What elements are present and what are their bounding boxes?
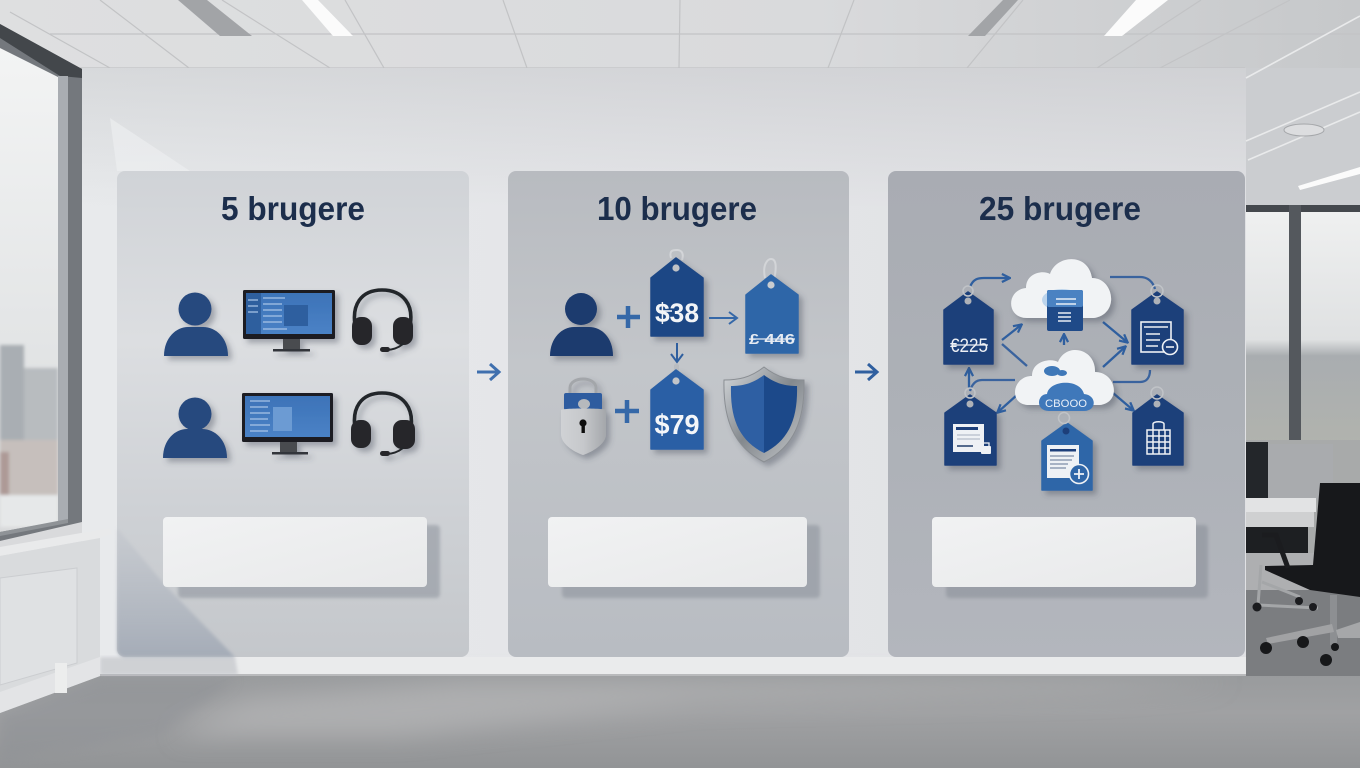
icon: shield	[724, 367, 804, 462]
icon: user	[550, 293, 613, 356]
price tag: $38: $38	[655, 298, 699, 328]
panel: 25 brugere	[888, 171, 1245, 657]
price tag: $79	[651, 364, 703, 449]
price tag: $38	[651, 250, 703, 336]
panel: 10 brugere	[508, 171, 849, 657]
ceiling	[0, 0, 1360, 70]
cloud: bottom	[1015, 350, 1114, 411]
icon: monitor bottom	[242, 393, 333, 454]
price tag: building icon	[1133, 387, 1183, 465]
connector lines	[970, 277, 1155, 391]
cloud: top	[1011, 259, 1111, 331]
arrow: down	[671, 343, 683, 362]
heading: 5 brugere	[221, 190, 365, 227]
left window	[0, 24, 112, 556]
window frame	[0, 24, 82, 541]
arrow: 5 to 10 brugere	[477, 364, 499, 380]
price tag: struck price	[746, 259, 798, 353]
icon: headset top	[352, 290, 413, 352]
icon: plus top	[617, 306, 640, 328]
connector arrows	[969, 278, 1133, 412]
price tag: document with lock	[945, 388, 996, 465]
ceiling lights	[178, 0, 1168, 36]
price tag: struck price: £ 446	[749, 331, 795, 348]
icon: padlock	[561, 379, 606, 455]
price tag: €225	[944, 286, 993, 364]
icon: plus bottom	[615, 400, 639, 423]
icon: monitor top	[243, 290, 335, 352]
blank white card	[163, 517, 440, 598]
arrow: right	[709, 312, 737, 324]
floor	[0, 676, 1360, 768]
blank white card	[932, 517, 1208, 598]
blank white card	[548, 517, 820, 598]
right room view	[1246, 16, 1360, 676]
price tag: invoice icon	[1132, 285, 1183, 364]
back wall	[82, 68, 1246, 660]
price tag: $79: $79	[654, 409, 700, 440]
baseboard	[100, 657, 1250, 675]
heading: 25 brugere	[979, 190, 1141, 227]
price tag: document with plus badge	[1042, 412, 1092, 490]
icon: user top	[164, 292, 228, 356]
heading: 10 brugere	[597, 190, 757, 227]
document in cloud	[1047, 290, 1083, 331]
radiator wall	[0, 538, 100, 713]
blue cloud label: CBOOO	[1045, 398, 1087, 410]
icon: user bottom	[163, 398, 227, 458]
price tag: €225: €225	[950, 336, 988, 357]
office chair	[1252, 483, 1360, 666]
panel: 5 brugere	[117, 171, 469, 657]
arrow: 10 to 25 brugere	[855, 364, 877, 380]
icon: headset bottom	[351, 393, 415, 456]
